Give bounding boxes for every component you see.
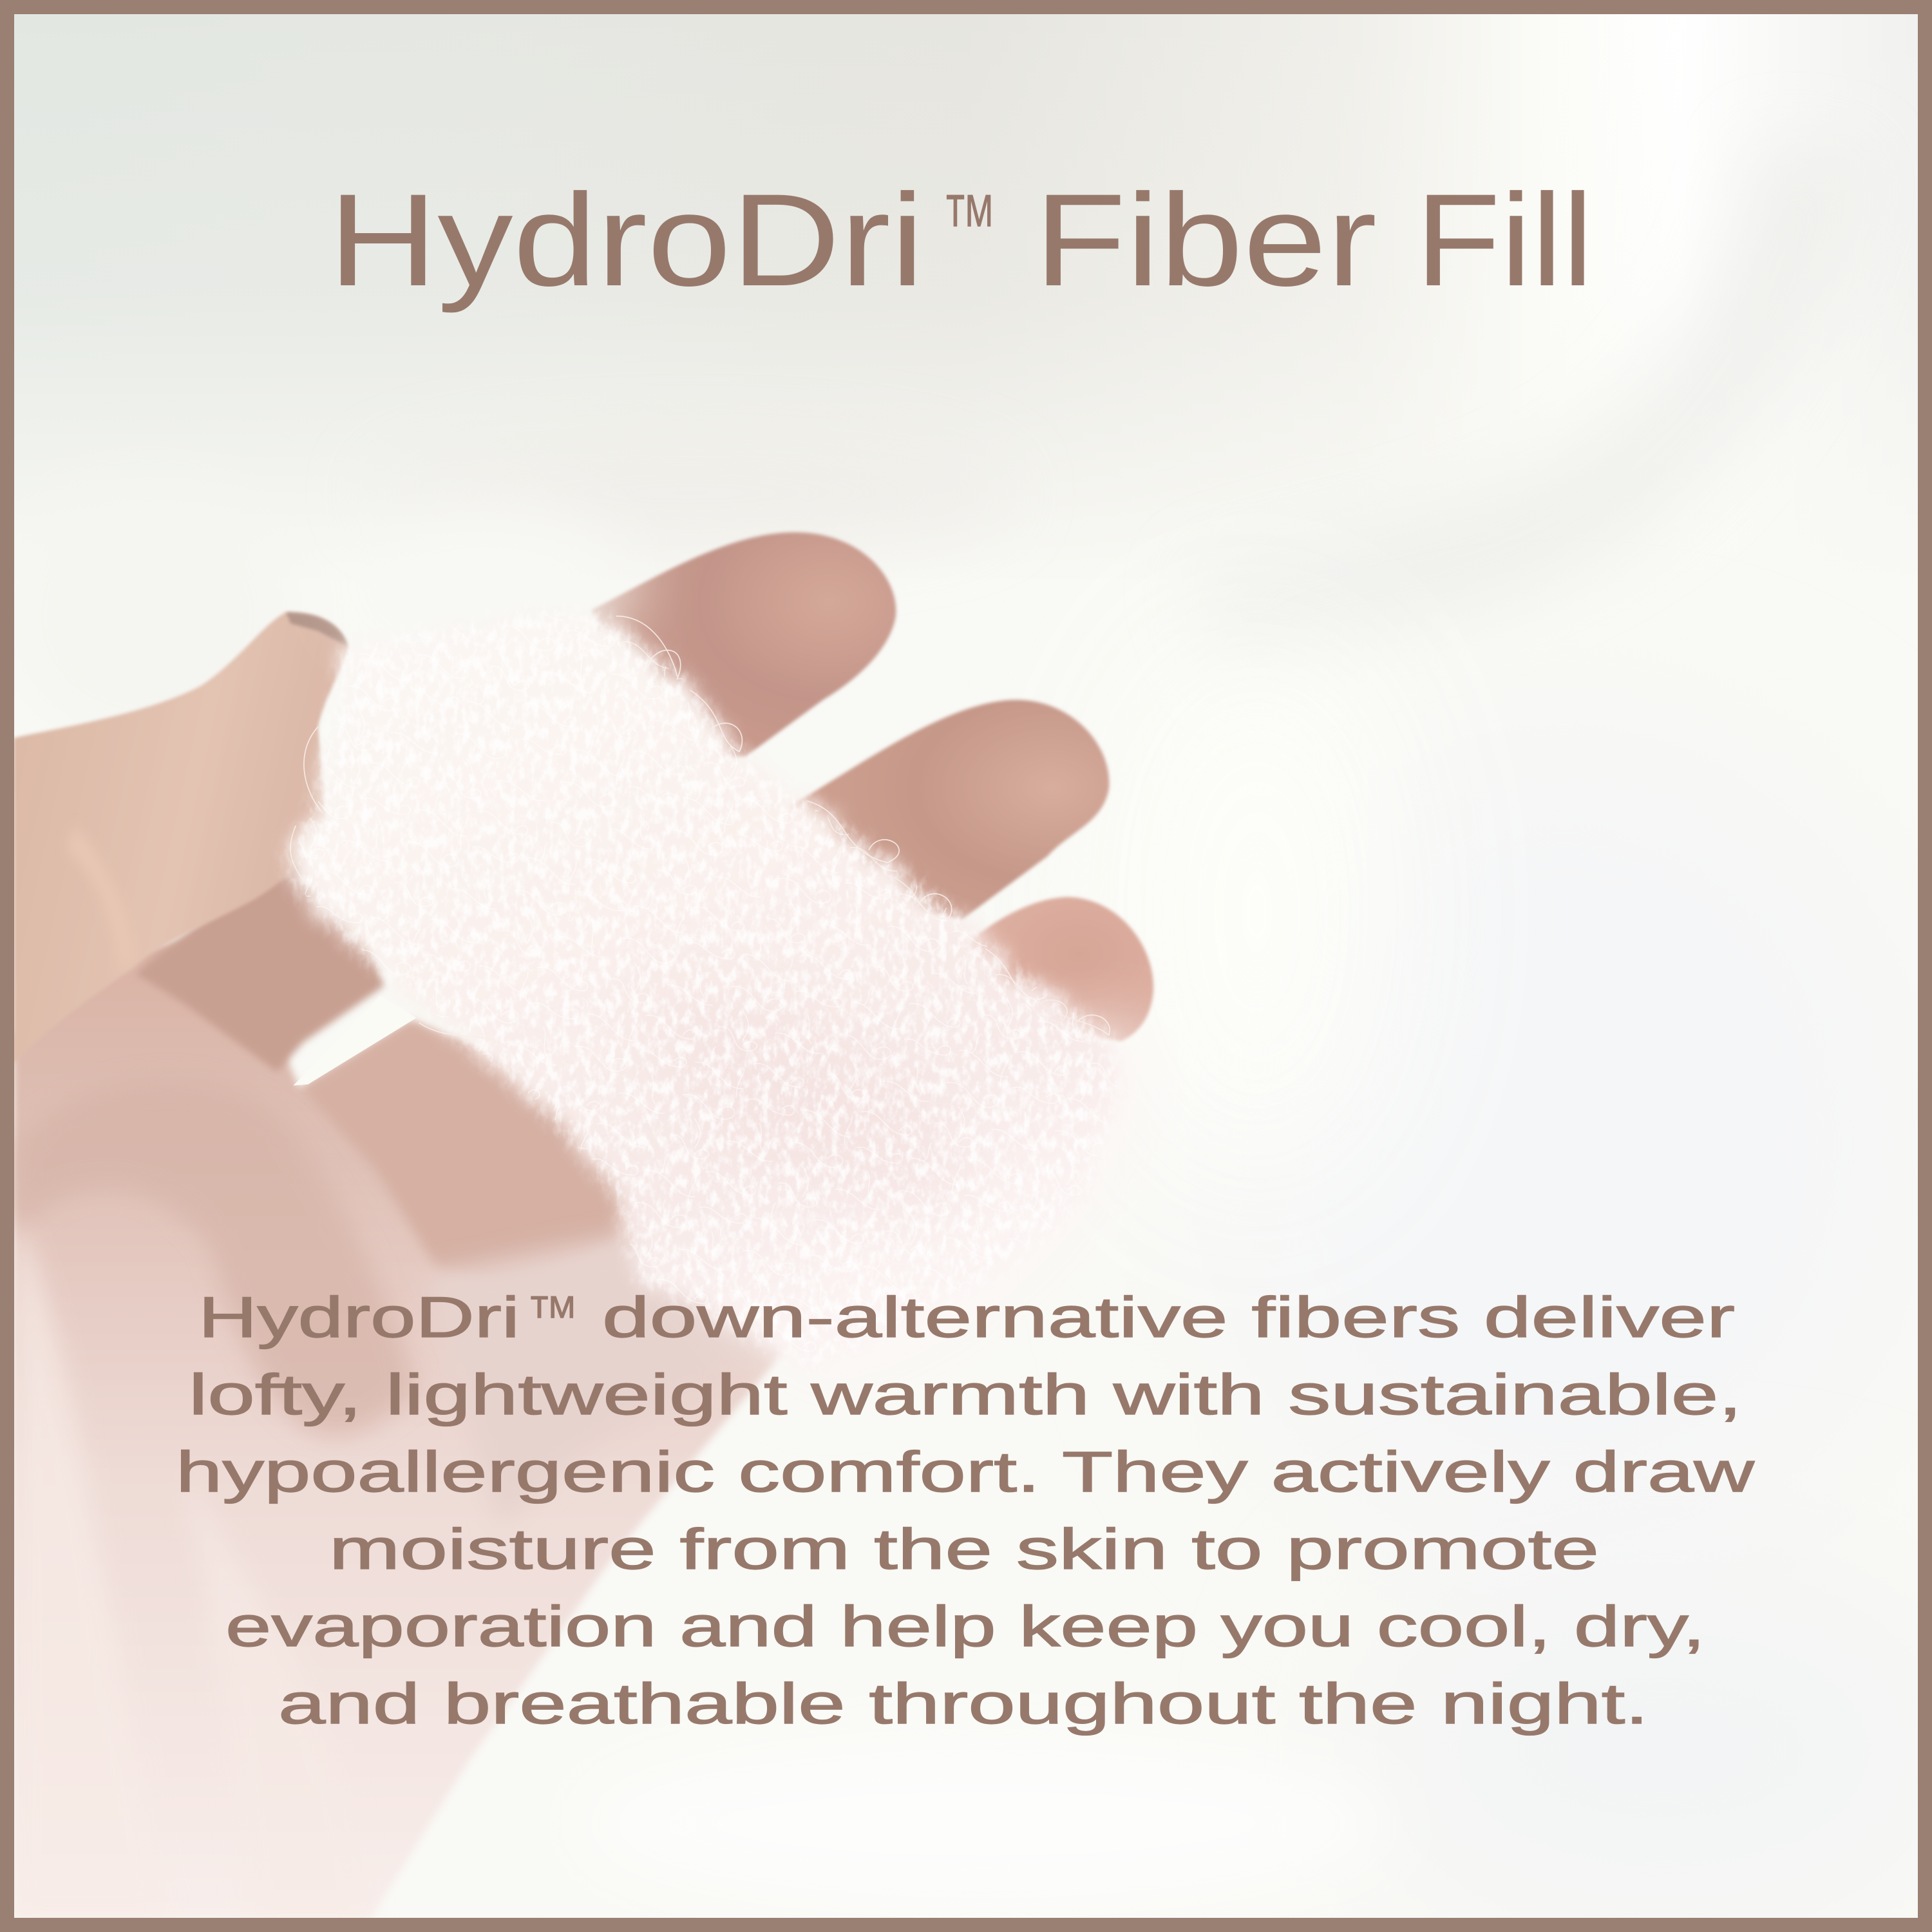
tuft soft halo [690,1023,1146,1380]
tuft body [287,610,1117,1368]
body line 1: down-alternative fibers deliver [602,1285,1735,1349]
hand holding the fibre [14,533,1153,1920]
ring finger [967,897,1153,1041]
body line 4: moisture from the skin to promote [329,1517,1599,1581]
finger behind thumb [135,838,384,1072]
thumb nail [286,612,348,647]
title word: Fill: Fill [1416,167,1593,314]
palm and lower hand [14,936,789,1920]
body line 6: and breathable throughout the night. [278,1671,1649,1736]
fibre tuft [278,574,1145,1365]
palm crease shading [14,1079,419,1435]
tuft pink shadow [604,940,998,1253]
body line 1: HydroDri [198,1285,520,1349]
body text [176,1283,1755,1736]
tuft curly fibres [299,641,1113,1338]
title word: HydroDri: HydroDri [328,167,924,314]
gap between thumb and fingers [293,996,417,1086]
body line 3: hypoallergenic comfort. They actively draw [176,1439,1755,1504]
fibres fading upward into the fill [357,505,629,653]
thumb crease [68,826,135,974]
body line 1: ™ [526,1283,579,1348]
title word: Fiber: Fiber [1034,167,1377,314]
body line 1 [198,1283,1735,1349]
stray fibres on the edges [290,616,1110,1059]
index finger [591,533,896,764]
tuft fibre texture [287,610,1117,1368]
body line 2: lofty, lightweight warmth with sustainable, [189,1362,1742,1426]
back of hand between fingers [303,1021,634,1287]
body line 5: evaporation and help keep you cool, dry, [225,1594,1705,1658]
title trademark: ™ [942,176,997,270]
thumb [14,612,348,1065]
middle finger [789,700,1109,919]
title [328,167,1593,314]
